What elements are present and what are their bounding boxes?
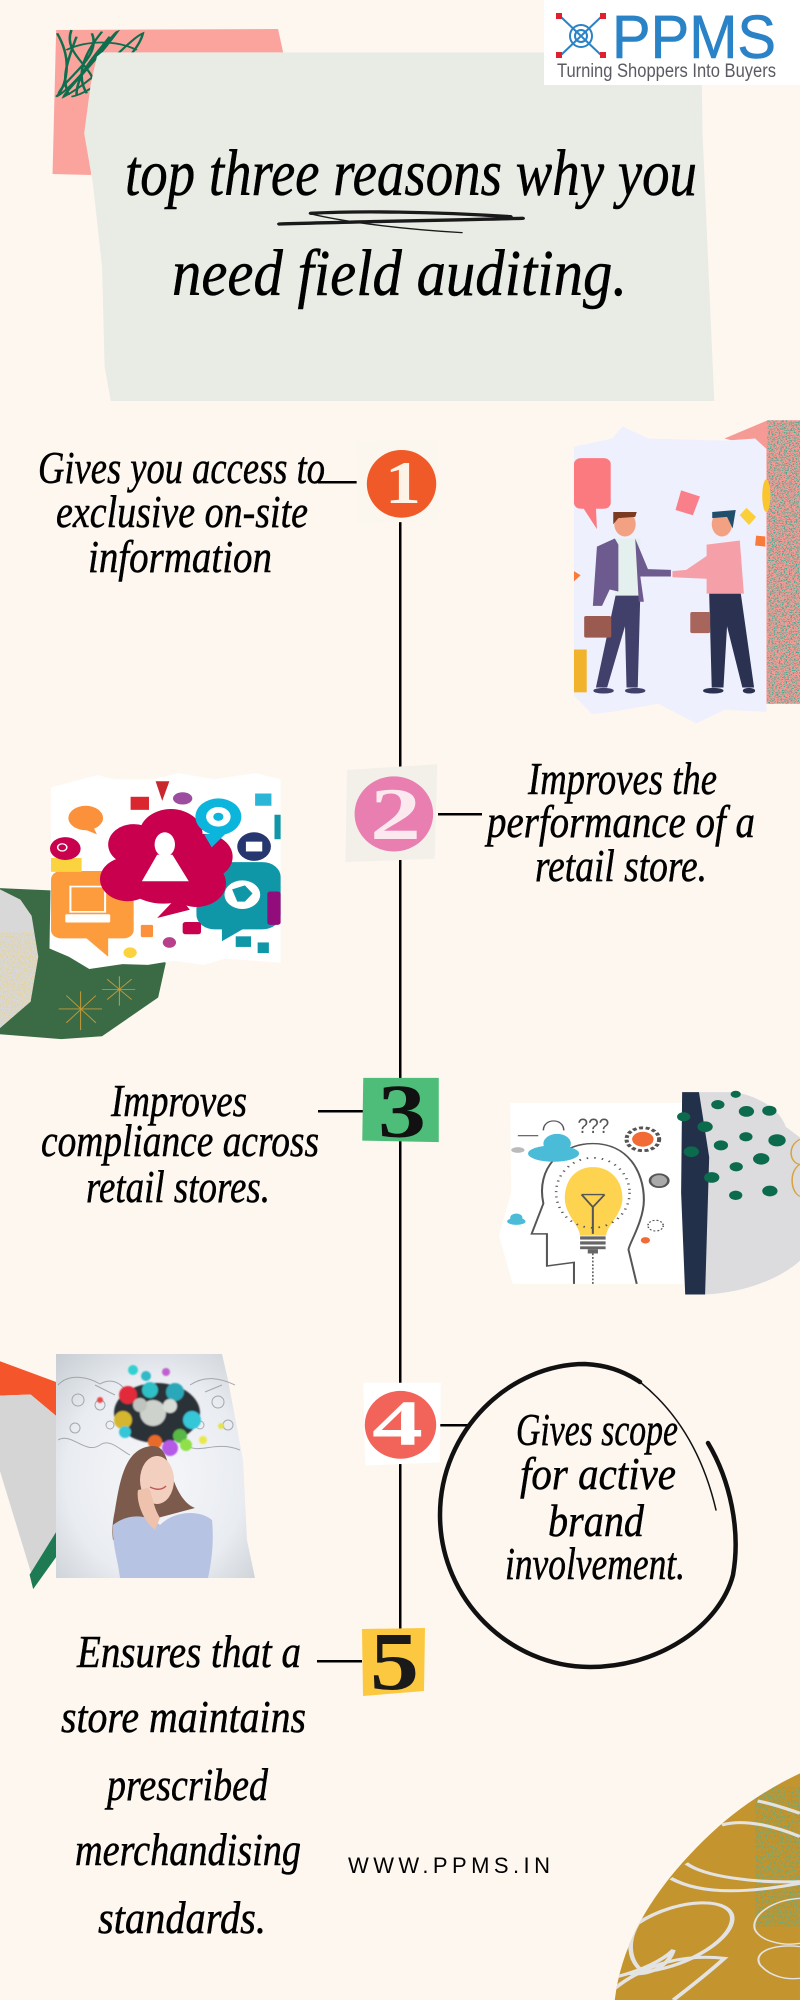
text block: reason 2 xyxy=(484,753,755,891)
green blob with grey stone xyxy=(0,888,166,1039)
text block: reason 1 xyxy=(38,442,325,582)
red and grey torn shapes xyxy=(0,1361,56,1589)
text block: reason 5: store maintains xyxy=(61,1691,306,1742)
colourful brain xyxy=(97,1365,224,1456)
text block: reason 5: merchandising xyxy=(75,1824,301,1875)
illustration: social media bubbles xyxy=(49,773,281,969)
gears xyxy=(627,1128,668,1243)
badge numeral 3: 3 xyxy=(378,1070,426,1154)
gold blob with white scribbles xyxy=(615,1773,800,2000)
text block: reason 3 xyxy=(41,1075,319,1212)
panel: row 1 and 2 artwork xyxy=(0,420,800,1039)
badge 2 xyxy=(345,764,437,862)
woman xyxy=(112,1446,213,1578)
text block: reason 4: brand xyxy=(548,1495,645,1546)
text block: reason 2: Improves the xyxy=(527,753,717,804)
text block: reason 1: Gives you access to xyxy=(38,442,325,493)
icon: network target xyxy=(556,13,606,58)
logo: PPMS: PPMS xyxy=(612,3,776,71)
grey blob with green dots xyxy=(677,1091,800,1295)
badge numeral 2: 2 xyxy=(370,774,421,856)
green scribble xyxy=(56,30,143,97)
title: top three reasons why you xyxy=(125,137,697,210)
text block: reason 4 xyxy=(505,1404,685,1589)
panel: row 3 and 4 artwork xyxy=(0,1078,800,1589)
text block: reason 4: for active xyxy=(520,1448,676,1499)
torn grey paper xyxy=(84,52,714,401)
badge numeral 5: 5 xyxy=(370,1615,419,1707)
text block: reason 3: Improves xyxy=(110,1075,247,1126)
text block: reason 1: information xyxy=(88,531,272,582)
speckled pink strip xyxy=(724,420,800,704)
timeline vertical line xyxy=(399,520,402,1645)
text block: reason 4: Gives scope xyxy=(516,1404,678,1455)
text block: reason 1: exclusive on-site xyxy=(56,486,308,537)
illustration: business handshake xyxy=(574,426,770,723)
title xyxy=(125,137,697,310)
website address: WWW.PPMS.IN xyxy=(348,1853,550,1878)
text block: reason 3: compliance across xyxy=(41,1115,319,1166)
pink note behind paper xyxy=(53,29,283,175)
text block: reason 4: involvement. xyxy=(505,1538,685,1589)
text block: reason 2: performance of a xyxy=(484,796,755,847)
badge 5 xyxy=(362,1628,425,1696)
illustration: head with lightbulb xyxy=(499,1103,684,1284)
badge 3 xyxy=(362,1078,439,1142)
text block: reason 5 xyxy=(61,1626,306,1943)
logo: PPMS xyxy=(544,0,800,85)
badge numeral 4: 4 xyxy=(372,1388,423,1460)
badge numeral 1: 1 xyxy=(385,450,421,516)
illustration: head with lightbulb: ??? xyxy=(578,1113,609,1138)
text block: reason 3: retail stores. xyxy=(86,1161,270,1212)
sketch doodles xyxy=(58,1377,240,1455)
connector lines xyxy=(317,481,482,1662)
title: need field auditing. xyxy=(172,237,627,310)
badge 4 xyxy=(363,1383,441,1466)
left man xyxy=(584,512,671,694)
text block: reason 5: prescribed xyxy=(105,1759,269,1810)
right man xyxy=(672,510,755,694)
hand drawn underline xyxy=(280,212,522,233)
text block: reason 5: Ensures that a xyxy=(76,1626,301,1677)
text block: reason 5: standards. xyxy=(98,1892,266,1943)
photo: woman with colourful brain xyxy=(56,1354,255,1578)
crimson cloud with person xyxy=(100,809,233,918)
hand drawn circle xyxy=(440,1364,736,1667)
badge 1 xyxy=(356,439,438,523)
panel: torn paper header with pink note xyxy=(53,29,714,401)
text block: reason 2: retail store. xyxy=(535,840,707,891)
